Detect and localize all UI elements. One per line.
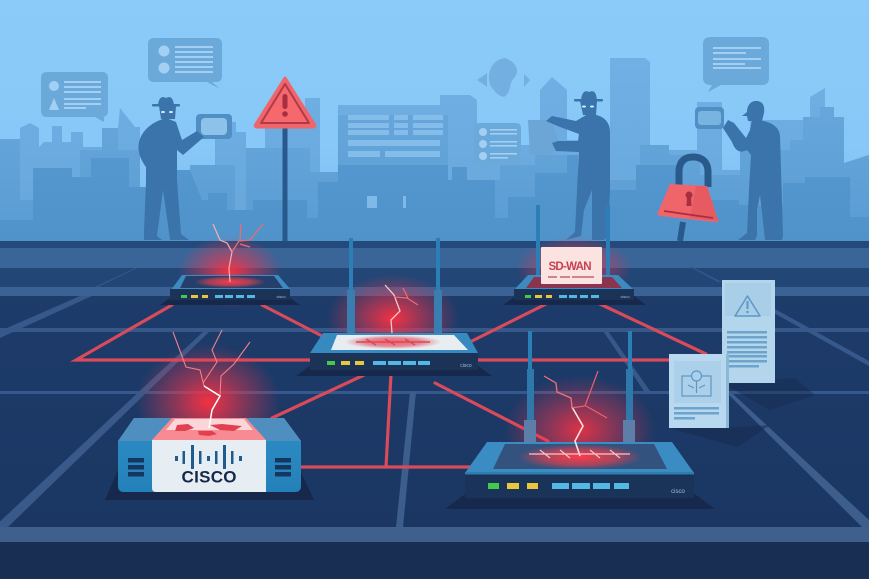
tablet: hacker three — [695, 107, 724, 129]
tablet: hacker two — [528, 120, 561, 155]
near skyline — [0, 155, 869, 242]
figure: hacker in hat, left — [138, 97, 204, 240]
router: bottom right: cisco — [671, 489, 685, 495]
router: SD-WAN — [503, 205, 646, 305]
router: centre: cisco — [460, 363, 472, 369]
Cisco logo bars — [175, 445, 242, 469]
speech bubble: right — [703, 37, 769, 92]
SD-WAN card — [541, 247, 602, 284]
figure: hacker in hat, centre — [546, 91, 610, 240]
figure: hacker in cap, right — [723, 101, 783, 240]
router: SD-WAN: cisco — [620, 294, 630, 299]
speech bubble: list — [474, 123, 521, 170]
central building windows — [348, 115, 443, 208]
router: bottom right — [445, 331, 715, 509]
router: centre — [296, 238, 492, 376]
router: top left — [160, 224, 300, 308]
icon: warning sign — [255, 78, 315, 241]
Cisco appliance — [105, 330, 314, 500]
background sky — [0, 0, 869, 242]
speech bubble: left — [41, 72, 108, 122]
middle skyline — [0, 107, 869, 242]
floor: dark ground plane — [0, 241, 869, 579]
document: network diagram — [669, 354, 770, 447]
icon: padlock — [657, 157, 718, 241]
far towers — [0, 58, 869, 242]
document: warning report — [722, 280, 815, 410]
icon: faded hook symbol — [477, 58, 530, 97]
Cisco appliance: CISCO — [182, 468, 236, 486]
speech bubble: upper left — [148, 38, 222, 89]
red network links — [76, 304, 706, 467]
city skyline — [0, 58, 869, 242]
SD-WAN card: SD-WAN — [548, 261, 592, 273]
router: top left: cisco — [276, 294, 286, 299]
tablet: hacker one — [196, 114, 232, 139]
